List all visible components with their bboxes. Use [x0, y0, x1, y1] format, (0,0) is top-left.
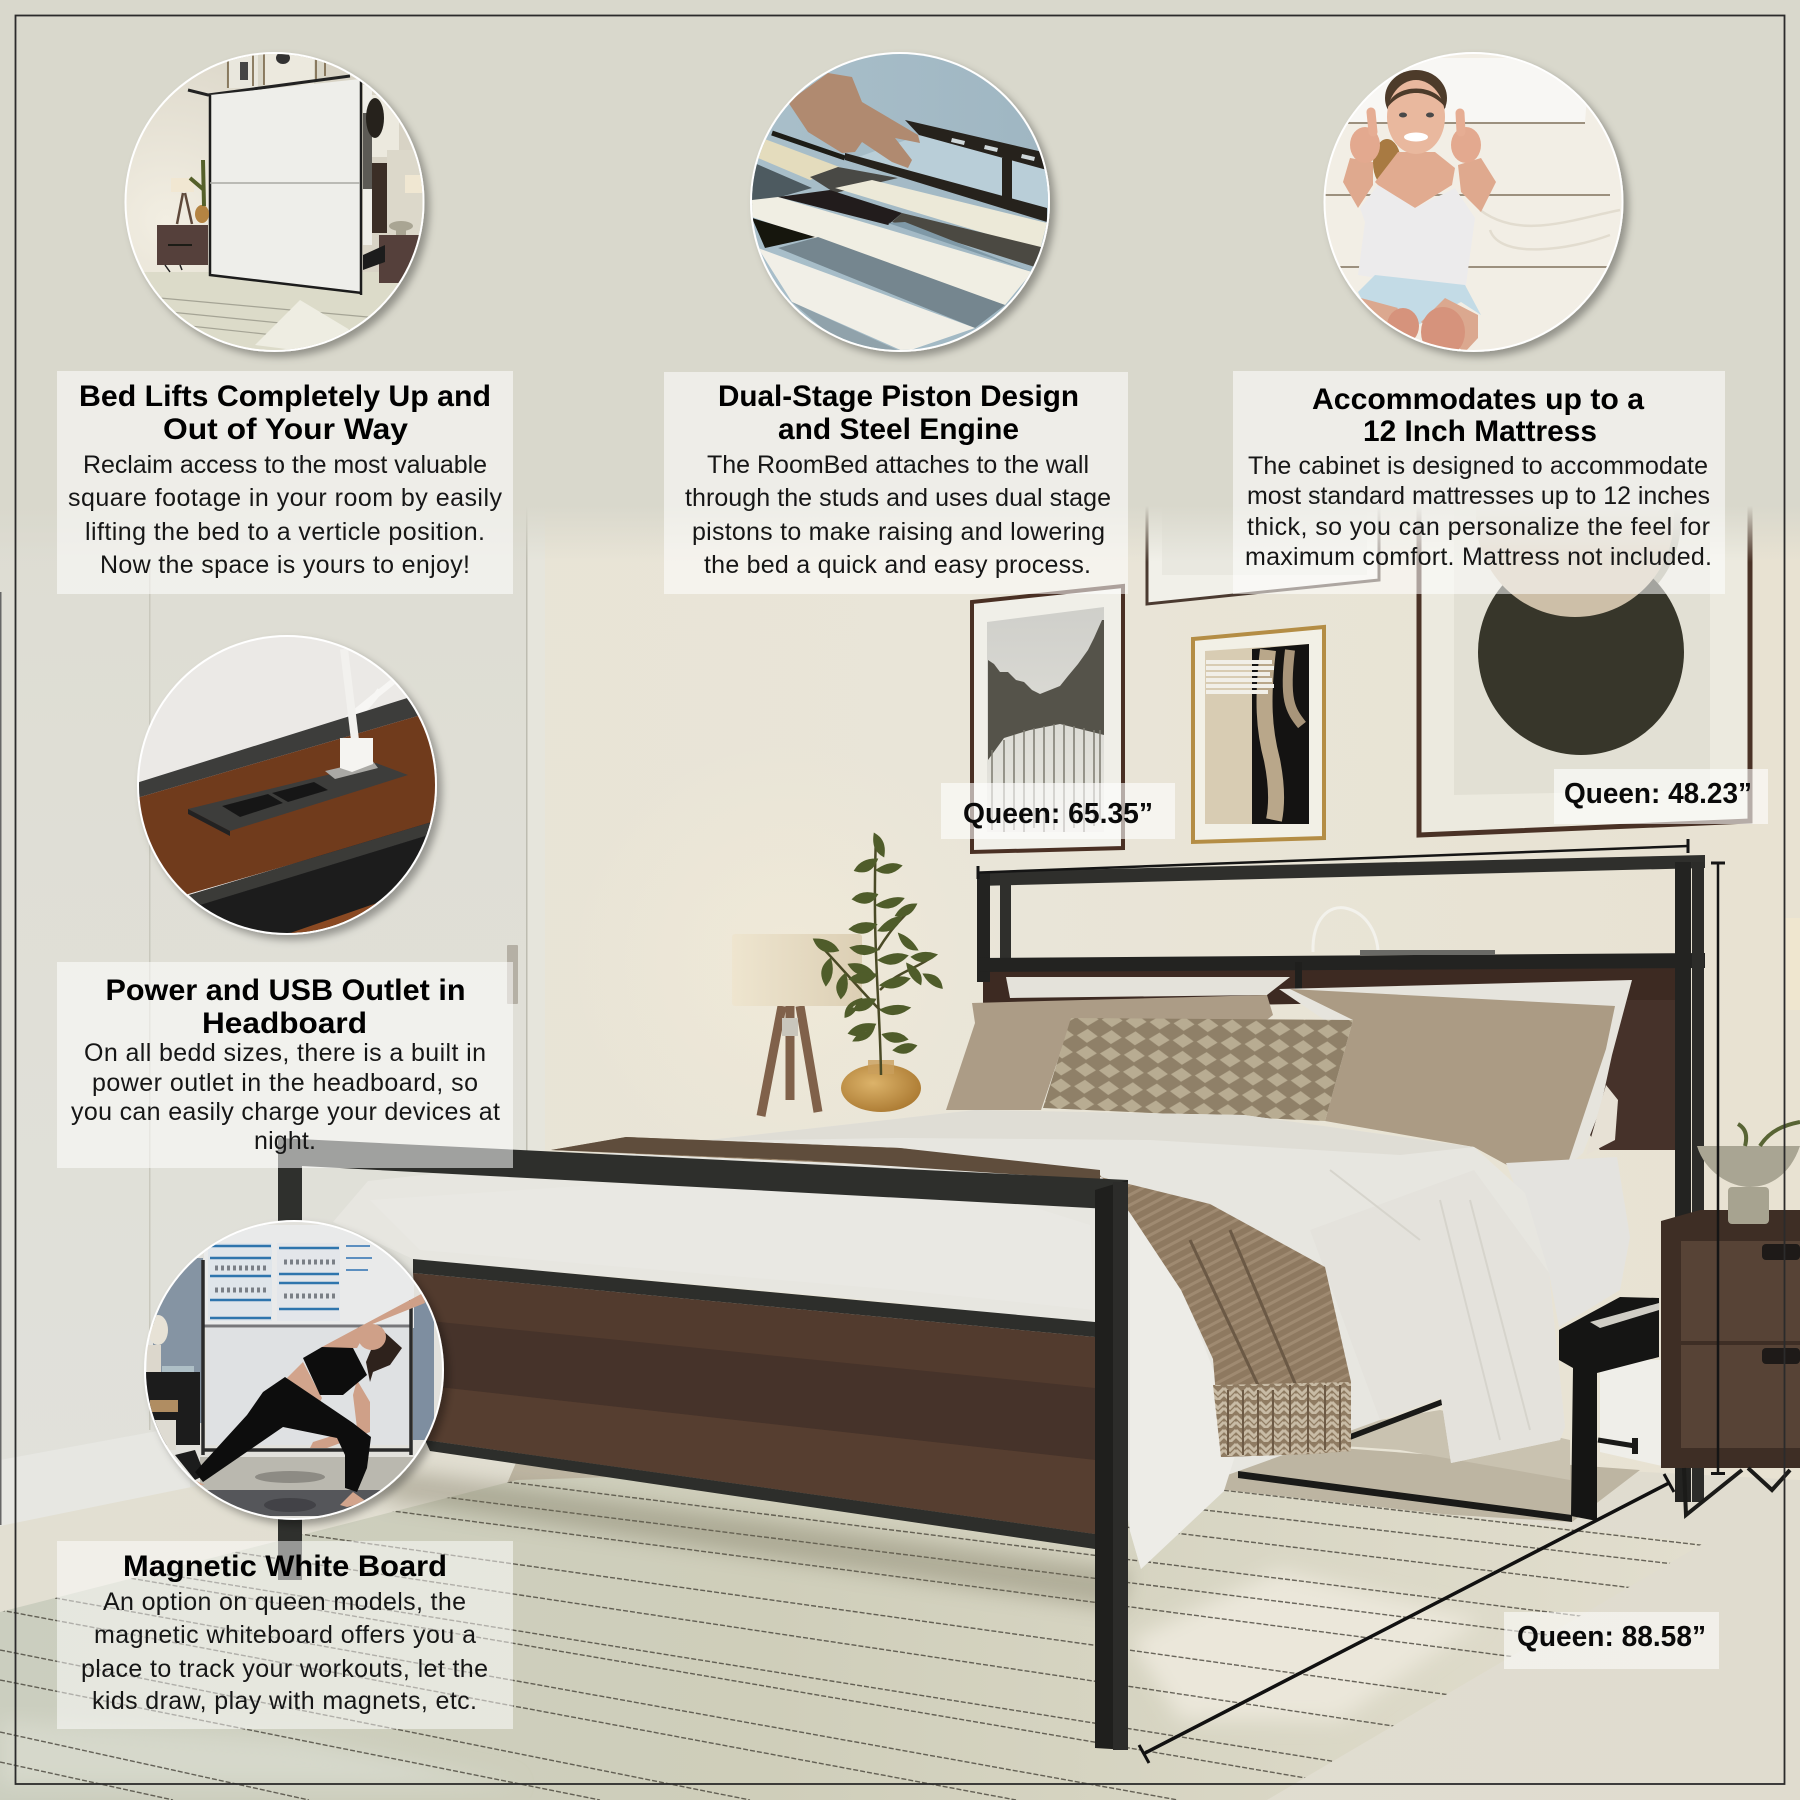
- body: bed lifts: Now the space is yours to enjoy!: [100, 551, 470, 579]
- width dimension line: [978, 839, 1688, 879]
- left edge mark: [0, 592, 2, 1525]
- dimension label: height: [1554, 769, 1768, 824]
- body: bed lifts: [68, 451, 502, 579]
- nightstand with bowl: [1661, 1122, 1800, 1515]
- throw blanket: [551, 1137, 1351, 1457]
- heading: mattress: Accommodates up to a: [1312, 383, 1644, 416]
- heading: power outlet: Power and USB Outlet in: [106, 974, 466, 1007]
- height dimension line: [1711, 863, 1725, 1474]
- heading: bed lifts: Bed Lifts Completely Up and: [79, 380, 491, 413]
- body: mattress: most standard mattresses up to 12 inches: [1247, 482, 1710, 510]
- heading: bed lifts: [79, 380, 491, 446]
- panel: piston design: [664, 372, 1128, 594]
- body: piston design: through the studs and uses dual stage: [685, 484, 1111, 512]
- heading: piston design: and Steel Engine: [778, 413, 1019, 446]
- potted plant in amber vase: [815, 835, 941, 1112]
- panel: bed lifts: [57, 371, 513, 594]
- body: bed lifts: square footage in your room by easily: [68, 484, 502, 512]
- body: power outlet: [71, 1039, 500, 1155]
- body: power outlet: power outlet in the headboard, so: [92, 1069, 478, 1097]
- dimension label: width: [941, 783, 1175, 839]
- bed side frame and leg: [1238, 1297, 1659, 1522]
- striped rug: [0, 1464, 1702, 1800]
- body: bed lifts: Reclaim access to the most valuable: [83, 451, 487, 479]
- heading: piston design: [718, 380, 1079, 446]
- body: mattress: The cabinet is designed to accommodate: [1248, 452, 1708, 480]
- body: piston design: pistons to make raising and lowering: [692, 518, 1105, 546]
- body: mattress: maximum comfort. Mattress not included.: [1245, 543, 1712, 571]
- body: whiteboard: place to track your workouts, let the: [81, 1655, 488, 1683]
- door handle: [507, 945, 518, 1004]
- heading: piston design: Dual-Stage Piston Design: [718, 380, 1079, 413]
- footboard: [278, 1138, 1128, 1750]
- mattress: [1506, 1157, 1630, 1327]
- body: bed lifts: lifting the bed to a verticle position.: [85, 518, 485, 546]
- table lamp: [732, 934, 862, 1116]
- dimension label: height: Queen: 48.23”: [1564, 778, 1752, 810]
- photo circle: woman on mattress: [1320, 50, 1630, 360]
- photo circle: magnetic whiteboard: [140, 1215, 450, 1525]
- body: whiteboard: magnetic whiteboard offers you a: [94, 1621, 476, 1649]
- panel: mattress: [1233, 371, 1725, 594]
- heading: mattress: [1312, 383, 1644, 448]
- heading: mattress: 12 Inch Mattress: [1363, 415, 1597, 448]
- panel: whiteboard: [57, 1541, 513, 1729]
- body: power outlet: On all bedd sizes, there is a built in: [84, 1039, 486, 1067]
- dimension label: length: [1504, 1612, 1719, 1669]
- body: power outlet: you can easily charge your devices at: [71, 1098, 500, 1126]
- dimension label: width: Queen: 65.35”: [963, 798, 1153, 830]
- dimension label: length: Queen: 88.58”: [1517, 1621, 1706, 1653]
- heading: bed lifts: Out of Your Way: [163, 413, 408, 446]
- wall art: small frame: [1147, 500, 1379, 604]
- heading: whiteboard: Magnetic White Board: [123, 1550, 447, 1583]
- body: whiteboard: An option on queen models, the: [103, 1588, 466, 1616]
- photo circle: bed lifted up: [120, 50, 430, 360]
- heading: power outlet: Headboard: [202, 1007, 367, 1040]
- body: mattress: [1245, 452, 1712, 571]
- headboard: [977, 855, 1705, 1502]
- body: power outlet: night.: [254, 1127, 316, 1155]
- body: piston design: The RoomBed attaches to the wall: [707, 451, 1089, 479]
- photo circle: power outlet: [130, 630, 450, 940]
- length dimension line: [1139, 1474, 1674, 1763]
- wall art: gold framed print: [1193, 627, 1324, 842]
- wall art: large circle print: [1419, 419, 1750, 835]
- heading: power outlet: [106, 974, 466, 1040]
- wall art: drip print: [972, 586, 1123, 852]
- body: piston design: [685, 451, 1111, 579]
- duvet: [333, 1110, 1565, 1569]
- body: whiteboard: kids draw, play with magnets, etc.: [92, 1687, 477, 1715]
- body: whiteboard: [81, 1588, 488, 1715]
- panel: power outlet: [57, 962, 513, 1168]
- bed pillows: [946, 977, 1632, 1193]
- top backdrop fade: [0, 0, 1800, 562]
- body: mattress: thick, so you can personalize the feel for: [1247, 513, 1710, 541]
- body: piston design: the bed a quick and easy process.: [704, 551, 1091, 579]
- photo circle: piston and slats: [750, 50, 1050, 360]
